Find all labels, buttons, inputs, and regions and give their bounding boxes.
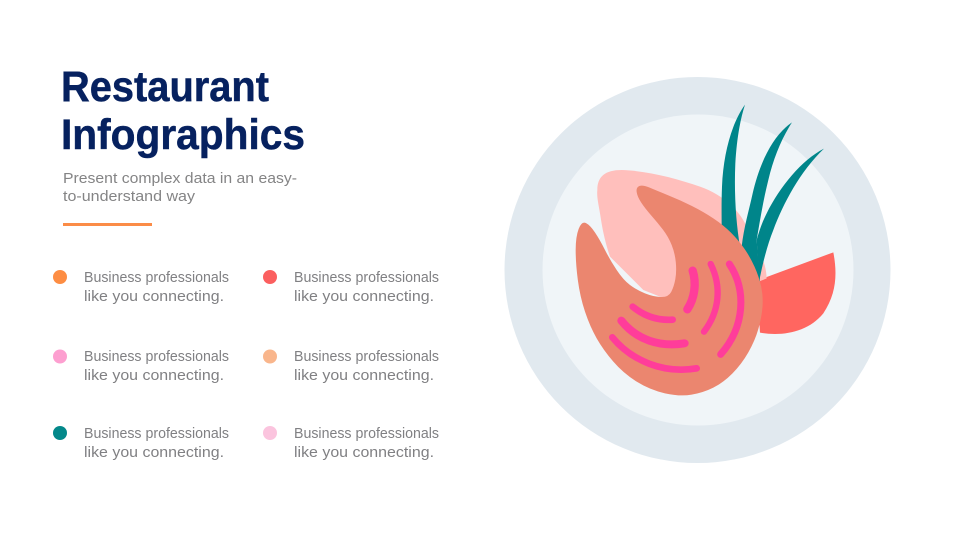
legend item: peach: like you connecting. (294, 367, 434, 384)
subtitle (63, 170, 297, 205)
subtitle: Present complex data in an easy- (63, 170, 297, 187)
subtitle: to-understand way (63, 188, 196, 205)
legend item: light pink: like you connecting. (294, 444, 434, 461)
title (61, 63, 305, 159)
plate rim (504, 77, 890, 463)
legend item: teal: like you connecting. (84, 444, 224, 461)
illustration: plate of salmon (504, 77, 890, 463)
legend item: teal: Business professionals (84, 425, 229, 442)
legend item: orange (53, 269, 229, 305)
legend item: red: like you connecting. (294, 288, 434, 305)
lemon wedge (757, 252, 835, 334)
salmon stripes (612, 264, 741, 370)
legend item: pink: Business professionals (84, 348, 229, 365)
orange divider (63, 223, 152, 226)
legend item: light pink (263, 425, 439, 461)
legend item: pink (53, 348, 229, 384)
legend item: peach (263, 348, 439, 384)
legend item: pink: like you connecting. (84, 367, 224, 384)
legend item: orange: like you connecting. (84, 288, 224, 305)
legend item: peach: Business professionals (294, 348, 439, 365)
plate centre (542, 114, 854, 426)
legend item: red: Business professionals (294, 269, 439, 286)
pink fish piece (597, 170, 767, 310)
garnish leaves (722, 105, 824, 282)
title: Infographics (61, 111, 305, 159)
legend item: orange: Business professionals (84, 269, 229, 286)
title: Restaurant (61, 63, 269, 111)
legend (53, 269, 439, 461)
legend item: teal (53, 425, 229, 461)
food (576, 105, 835, 395)
salmon body (576, 186, 763, 395)
legend item: red (263, 269, 439, 305)
legend item: light pink: Business professionals (294, 425, 439, 442)
